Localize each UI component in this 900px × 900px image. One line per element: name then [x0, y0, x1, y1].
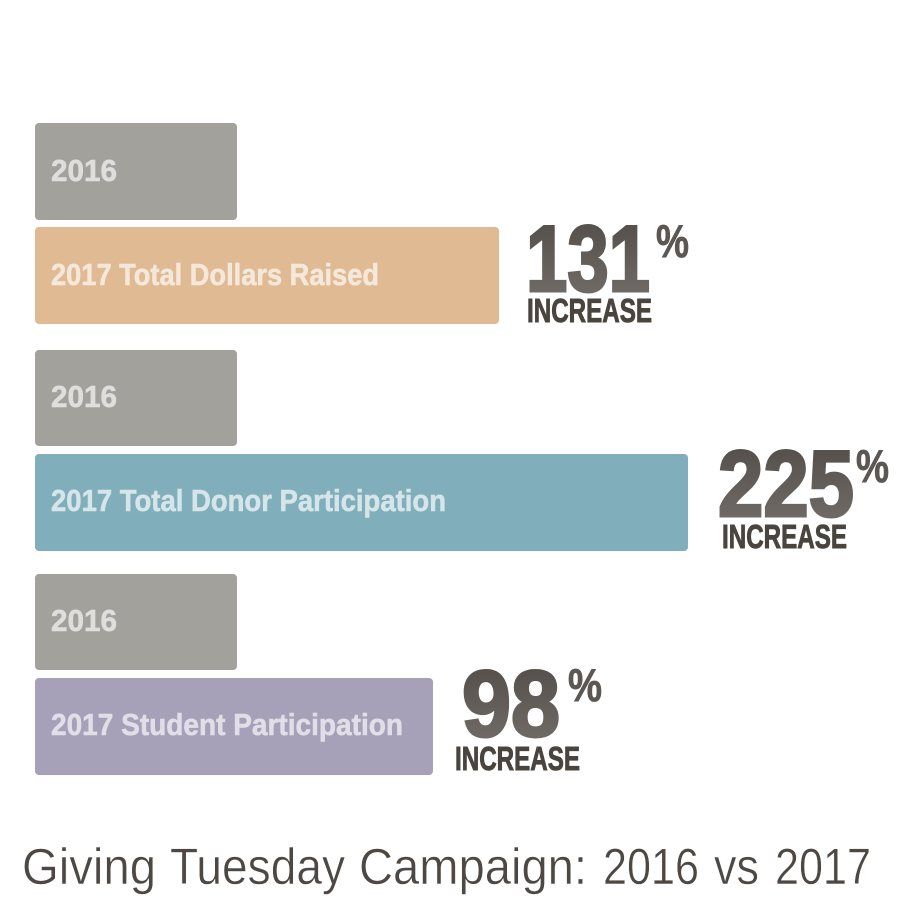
title: Giving [22, 838, 156, 895]
bar: 2017 dollars [35, 227, 499, 324]
bar: 2017 students: 2017 Student Participation [51, 707, 403, 742]
stat: 225% increase: INCREASE [722, 518, 847, 555]
stat: 131% increase: 131 [526, 206, 650, 311]
title: Campaign: [359, 838, 587, 895]
bar: 2016 donors [35, 350, 237, 446]
title: Tuesday [170, 838, 345, 895]
bar: 2017 donors: 2017 Total Donor Participation [51, 483, 446, 518]
stat: 225% increase: 225 [718, 431, 854, 536]
bar: 2016 students: 2016 [51, 603, 117, 638]
stat: 98% increase: INCREASE [455, 740, 580, 777]
panel: total dollars raised [35, 123, 689, 329]
stat: 98% increase [455, 651, 602, 777]
bar: 2017 donors [35, 454, 688, 551]
bar: 2016 students [35, 574, 237, 670]
bar: 2017 dollars: 2017 Total Dollars Raised [51, 257, 379, 292]
title: 2017 [775, 838, 871, 895]
stat: 131% increase: % [656, 215, 689, 267]
panel: total donor participation [35, 350, 889, 555]
stat: 98% increase: % [568, 659, 602, 711]
title: 2016 [603, 838, 699, 895]
title: vs [714, 838, 759, 895]
bar: 2016 donors: 2016 [51, 379, 117, 414]
bar: 2016 dollars: 2016 [51, 153, 117, 188]
bar: 2017 students [35, 678, 433, 775]
stat: 98% increase: 98 [462, 651, 560, 756]
bar: 2016 dollars [35, 123, 237, 220]
stat: 225% increase: % [856, 440, 889, 492]
panel: student participation [35, 574, 602, 777]
stat: 131% increase: INCREASE [527, 292, 652, 329]
